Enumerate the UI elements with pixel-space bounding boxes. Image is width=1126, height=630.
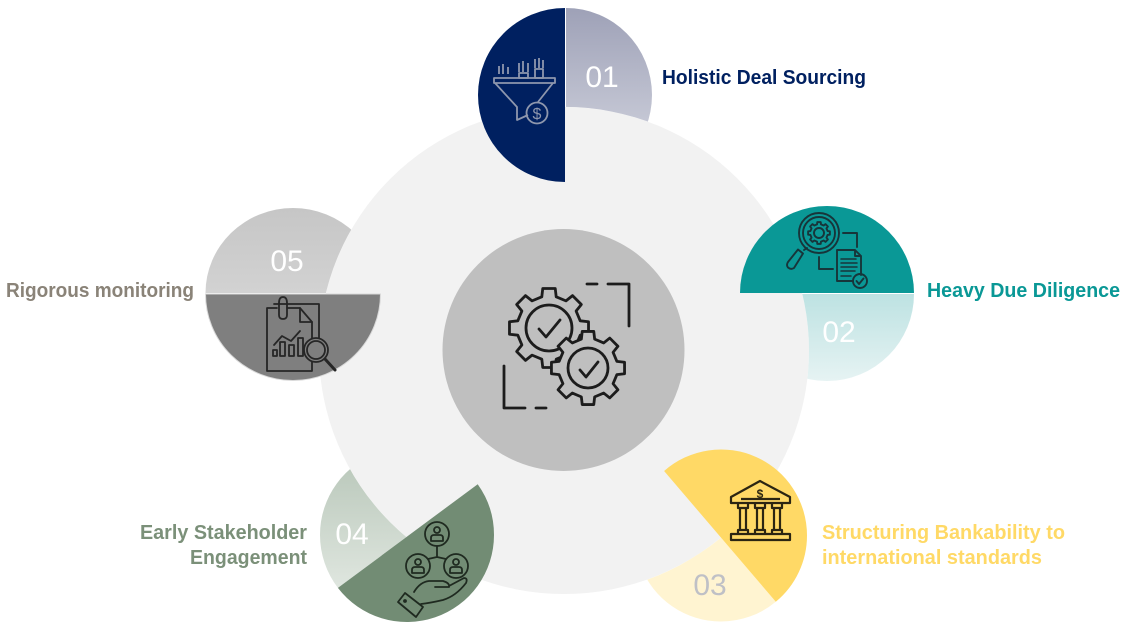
- icon: magnifier over gear and document: [787, 213, 867, 288]
- step 05: rigorous monitoring: [6, 208, 380, 380]
- label: Rigorous monitoring: Rigorous monitoring: [6, 280, 194, 302]
- label: Structuring Bankability to international standards: [822, 522, 1065, 569]
- dark half segment 05: [206, 294, 380, 380]
- dark half segment 01: [478, 8, 565, 182]
- light half segment 04: [320, 469, 406, 588]
- large light grey ring disc: [319, 107, 809, 594]
- dark half segment 03: [664, 449, 807, 602]
- centre disc with gears icon: [442, 229, 684, 471]
- icon: bank building: $: [757, 487, 764, 501]
- label: Early Stakeholder Engagement: Engagement: [190, 547, 307, 569]
- dark half segment 04: [338, 484, 494, 622]
- light half segment 03: [647, 538, 776, 622]
- label: Structuring Bankability to international standards: Structuring Bankability to: [822, 522, 1065, 544]
- icon: gears with check marks: [504, 284, 629, 408]
- icon: bank building: [731, 481, 790, 540]
- step 01: holistic deal sourcing: [478, 8, 866, 182]
- label: Holistic Deal Sourcing: Holistic Deal Sourcing: [662, 67, 866, 89]
- icon: hand holding connected people: [398, 522, 468, 617]
- step 02: heavy due diligence: [740, 206, 1120, 381]
- number 05: 05: [270, 245, 304, 278]
- step 04: early stakeholder engagement: [141, 469, 494, 622]
- number 01: 01: [585, 61, 619, 94]
- dark half segment 02: [740, 206, 914, 293]
- label: Structuring Bankability to international standards: international standards: [822, 547, 1042, 569]
- icon: funnel with dollar coin: [494, 58, 555, 124]
- label: Early Stakeholder Engagement: [140, 522, 307, 569]
- label: Heavy Due Diligence: Heavy Due Diligence: [927, 280, 1120, 302]
- label: Early Stakeholder Engagement: Early Stakeholder: [140, 522, 307, 544]
- icon: funnel with dollar coin: $: [533, 106, 542, 123]
- number 03: 03: [693, 569, 727, 602]
- step 03: structuring bankability: [635, 449, 1065, 622]
- light half segment 02: [802, 294, 914, 381]
- number 04: 04: [335, 518, 369, 551]
- light half segment 01: [566, 8, 652, 122]
- icon: report with chart and magnifier: [267, 297, 335, 371]
- light half segment 05: [206, 208, 352, 293]
- number 02: 02: [822, 316, 856, 349]
